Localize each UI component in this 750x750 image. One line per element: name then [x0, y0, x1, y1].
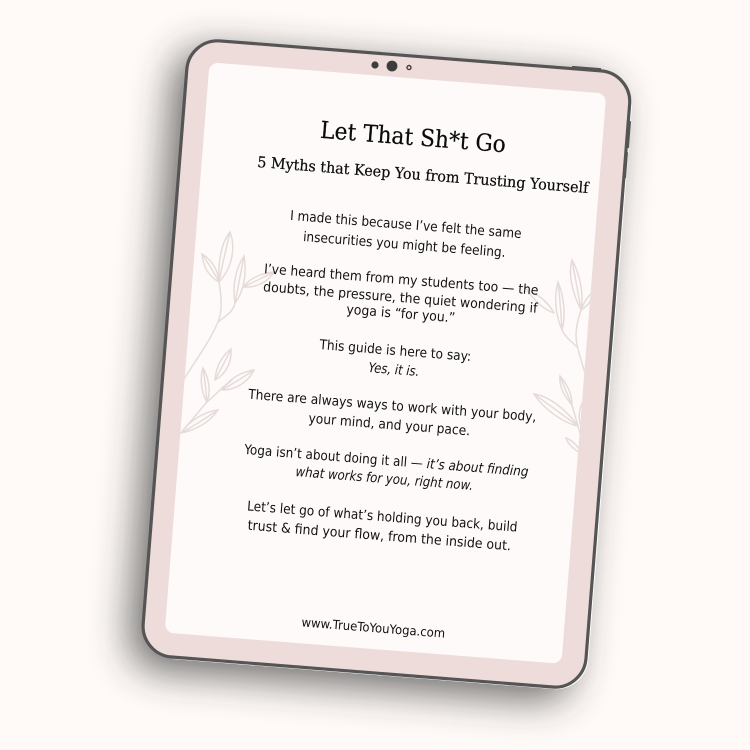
right plant illustration — [527, 260, 593, 453]
paragraph 3: Yes, it is. — [368, 360, 420, 380]
subheading: 5 Myths that Keep You from Trusting Yourself — [257, 153, 590, 197]
tablet shadow — [127, 47, 619, 702]
heading: Let That Sh*t Go — [319, 116, 507, 158]
paragraph 4: your mind, and your pace. — [308, 411, 471, 439]
screen — [165, 62, 606, 664]
tablet white back edge — [144, 41, 634, 692]
paragraph 3 — [318, 337, 472, 380]
body text — [243, 208, 539, 554]
paragraph 5: what works for you, right now. — [295, 464, 474, 494]
paragraph 5: Yoga isn’t about doing it all — it’s about finding — [243, 442, 529, 480]
website url: www.TrueToYouYoga.com — [301, 614, 446, 641]
paragraph 2: I’ve heard them from my students too — the — [264, 261, 539, 299]
tablet body — [141, 38, 632, 689]
camera dots — [371, 61, 411, 71]
paragraph 6 — [247, 498, 518, 554]
tablet — [141, 38, 634, 692]
side buttons — [572, 66, 631, 178]
paragraph 2 — [263, 261, 539, 326]
paragraph 4: There are always ways to work with your body, — [247, 387, 537, 425]
paragraph 2: doubts, the pressure, the quiet wondering if — [263, 279, 539, 317]
paragraph 3: This guide is here to say: — [318, 337, 472, 365]
paragraph 1 — [290, 208, 522, 261]
paragraph 6: Let’s let go of what’s holding you back, build — [247, 498, 518, 536]
paragraph 6: trust & find your flow, from the inside out. — [247, 518, 512, 554]
paragraph 2: yoga is “for you.” — [346, 302, 456, 326]
left plant illustration — [180, 232, 274, 434]
paragraph 1: I made this because I’ve felt the same — [290, 208, 522, 242]
paragraph 1: insecurities you might be feeling. — [302, 229, 506, 261]
